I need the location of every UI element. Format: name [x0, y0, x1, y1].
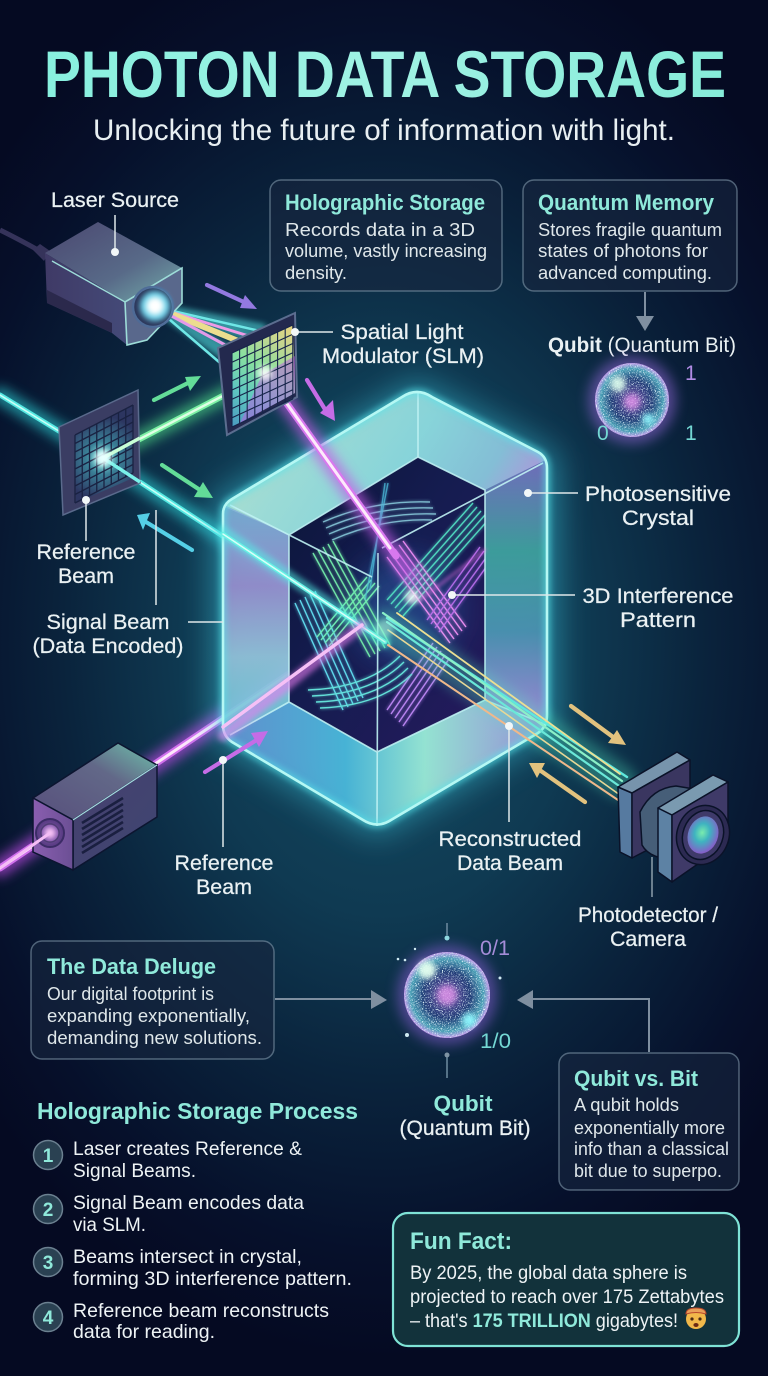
step 1 — [34, 1138, 302, 1182]
step 3: forming 3D interference pattern. — [73, 1268, 352, 1290]
step 3: 3 — [43, 1253, 53, 1274]
label: reference beam bottom: Reference — [174, 851, 274, 875]
qubit bottom state labels — [480, 937, 511, 1053]
arrow: qubit vs bit to qubit — [517, 990, 649, 1052]
panel: quantum memory: Stores fragile quantum — [538, 219, 722, 240]
step 1: Laser creates Reference & — [73, 1138, 302, 1160]
label: laser source: Laser Source — [51, 188, 179, 212]
panel: fun fact: – that's 175 TRILLION gigabytes! — [410, 1310, 678, 1332]
panel: holographic storage: Records data in a 3D — [285, 219, 475, 240]
step 4: Reference beam reconstructs — [73, 1300, 329, 1322]
leader lines — [82, 215, 652, 897]
arrow: SLM to crystal — [307, 380, 335, 421]
label: 3D interference pattern — [582, 584, 734, 632]
arrow: signal up — [154, 376, 201, 400]
crystal left face — [220, 503, 289, 740]
interference pattern — [295, 483, 492, 726]
label: photosensitive crystal: Crystal — [622, 506, 694, 530]
step 1: Signal Beams. — [73, 1160, 196, 1182]
panel: quantum memory: advanced computing. — [538, 262, 712, 283]
label: reference beam bottom — [174, 851, 274, 899]
arrow: quantum memory to qubit — [636, 292, 654, 331]
beams behind the crystal — [0, 307, 385, 868]
step 3 — [34, 1246, 352, 1290]
step 2 — [34, 1192, 304, 1236]
panel: the data deluge — [31, 941, 274, 1059]
photodetector camera — [618, 752, 738, 882]
step 4: data for reading. — [73, 1321, 215, 1343]
qubit state labels: 1 — [685, 422, 697, 445]
label: reconstructed data beam — [438, 827, 582, 875]
panel: holographic storage: volume, vastly increasing — [285, 240, 487, 261]
arrow: reference beam — [205, 731, 268, 772]
label: photodetector — [578, 903, 718, 951]
label: signal beam: (Data Encoded) — [32, 634, 184, 658]
label: 3D interference pattern: Pattern — [620, 608, 696, 632]
arrows — [137, 285, 626, 802]
beams through the crystal — [223, 373, 627, 800]
label: qubit bottom — [400, 1091, 530, 1140]
label: photodetector: Camera — [610, 927, 686, 951]
label: reference beam left: Reference — [36, 540, 136, 564]
crystal cavity — [289, 457, 485, 752]
label: reconstructed data beam: Data Beam — [457, 851, 563, 875]
step 2: Signal Beam encodes data — [73, 1192, 304, 1214]
arrow: to crystal green — [162, 465, 213, 498]
step 4: 4 — [43, 1308, 54, 1329]
panel: fun fact: Fun Fact: — [410, 1228, 512, 1255]
laser source device — [0, 222, 182, 345]
crystal bottom face — [220, 700, 550, 830]
crystal — [213, 380, 557, 836]
arrow: from camera — [529, 763, 585, 802]
panel: fun fact: By 2025, the global data sphere is — [410, 1262, 687, 1284]
panel: qubit vs bit: Qubit vs. Bit — [574, 1066, 699, 1091]
qubit bottom state labels: 0/1 — [480, 937, 510, 960]
label: reference beam left: Beam — [58, 564, 114, 588]
label: reconstructed data beam: Reconstructed — [438, 827, 582, 851]
icon: qubit sphere bottom — [397, 923, 502, 1078]
panel: qubit vs bit: exponentially more — [574, 1117, 725, 1138]
label: reference beam left — [36, 540, 136, 588]
arrow: signal back cyan — [137, 513, 192, 550]
subtitle: Unlocking the future of information with light. — [93, 114, 675, 147]
panel: qubit vs bit: A qubit holds — [574, 1094, 679, 1115]
icon: mind blown emoji — [686, 1308, 706, 1329]
panel: the data deluge: The Data Deluge — [47, 954, 216, 979]
crystal top face — [220, 385, 550, 535]
crystal right face — [485, 458, 550, 725]
label: photosensitive crystal — [585, 482, 731, 530]
label: qubit bottom: (Quantum Bit) — [400, 1116, 530, 1140]
process heading: Holographic Storage Process — [37, 1098, 358, 1124]
panel: qubit vs bit — [559, 1053, 739, 1190]
panel: quantum memory: Quantum Memory — [538, 190, 715, 215]
panel: the data deluge: demanding new solutions. — [47, 1027, 262, 1048]
label: photodetector: Photodetector / — [578, 903, 718, 927]
step 2: 2 — [43, 1200, 53, 1221]
spatial light modulator — [218, 313, 297, 435]
panel: holographic storage — [270, 180, 502, 291]
label: reference beam bottom: Beam — [196, 875, 252, 899]
label: photosensitive crystal: Photosensitive — [585, 482, 731, 506]
qubit state labels: 0 — [597, 422, 609, 445]
reference laser device — [0, 743, 157, 870]
step 3: Beams intersect in crystal, — [73, 1246, 302, 1268]
step 2: via SLM. — [73, 1214, 146, 1236]
qubit state labels: 1 — [685, 362, 697, 385]
panel: holographic storage: Holographic Storage — [285, 190, 485, 215]
step 4 — [34, 1300, 329, 1343]
arrow: deluge to qubit — [275, 990, 387, 1009]
reference beam mirror — [59, 390, 140, 515]
panel: quantum memory — [523, 180, 737, 291]
label: 3D interference pattern: 3D Interference — [582, 584, 734, 608]
icon: qubit sphere top — [588, 356, 676, 444]
label: signal beam: Signal Beam — [46, 610, 170, 634]
panel: qubit vs bit: bit due to superpo. — [574, 1160, 722, 1181]
panel: holographic storage process — [34, 1098, 358, 1343]
arrow: laser to SLM — [207, 285, 257, 309]
arrow: to camera — [571, 706, 626, 745]
panel: holographic storage: density. — [285, 262, 347, 283]
label: signal beam — [32, 610, 184, 658]
crystal edges — [230, 392, 547, 826]
panel: the data deluge: Our digital footprint is — [47, 983, 214, 1004]
panel: fun fact: projected to reach over 175 Zettabytes — [410, 1286, 724, 1308]
qubit state labels — [597, 362, 697, 445]
step 1: 1 — [43, 1146, 54, 1167]
label: qubit top: Qubit (Quantum Bit) — [548, 333, 736, 357]
label: spatial light modulator: Spatial Light — [340, 320, 464, 344]
panel: fun fact — [393, 1213, 739, 1346]
label: spatial light modulator: Modulator (SLM) — [322, 344, 484, 368]
diagram — [0, 215, 738, 897]
label: qubit bottom: Qubit — [434, 1091, 493, 1116]
panel: qubit vs bit: info than a classical — [574, 1138, 729, 1159]
label: spatial light modulator — [322, 320, 484, 368]
panel: quantum memory: states of photons for — [538, 240, 708, 261]
panel: the data deluge: expanding exponentially, — [47, 1005, 250, 1026]
qubit bottom state labels: 1/0 — [480, 1030, 511, 1053]
